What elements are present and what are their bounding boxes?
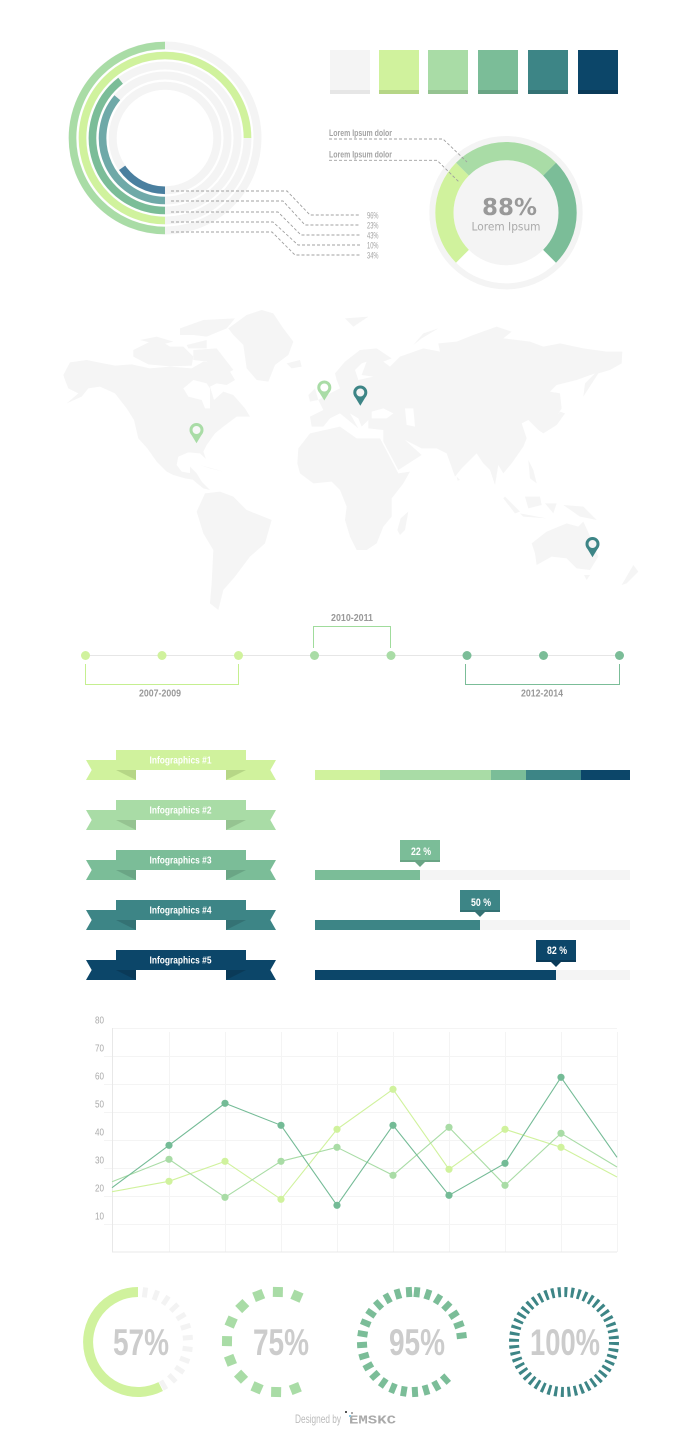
progress bar 82%: 82 % — [547, 945, 567, 957]
donut caption: Lorem Ipsum — [472, 220, 540, 234]
progress bar 22% — [315, 840, 630, 880]
line chart — [95, 1016, 618, 1252]
timeline labels: 2007-2009 — [139, 688, 181, 700]
map pin: Australia — [586, 538, 599, 557]
timeline labels — [139, 613, 563, 700]
ribbon: Infographics #5 — [86, 950, 276, 980]
chart axis labels: 40 — [95, 1128, 104, 1138]
timeline dots — [81, 651, 624, 660]
ribbon: Infographics #1: Infographics #1 — [150, 756, 212, 766]
ring percentage labels: 34% — [367, 250, 378, 260]
panel: donut chart 88% — [329, 128, 580, 286]
chart axis labels: 80 — [95, 1016, 104, 1026]
ribbon: Infographics #5: Infographics #5 — [150, 956, 212, 966]
ring percentage labels: 10% — [367, 240, 378, 250]
ribbon: Infographics #4 — [86, 900, 276, 930]
map pin: USA — [190, 424, 203, 443]
series: dark green — [112, 1074, 617, 1209]
panel: concentric ring chart — [72, 46, 378, 260]
ring tracks — [72, 46, 258, 230]
chart axis labels: 10 — [95, 1212, 104, 1222]
north america and greenland — [63, 310, 302, 480]
map pin: UK — [318, 382, 330, 400]
gauge 95%: 95% — [389, 1322, 445, 1363]
gauge ticks — [142, 1287, 193, 1391]
gauge 75% — [221, 1286, 309, 1397]
footer credit — [295, 1411, 396, 1428]
ring percentage labels: 43% — [367, 230, 378, 240]
chart axis labels: 20 — [95, 1184, 104, 1194]
ring percentage labels: 23% — [367, 220, 378, 230]
gauge 95% — [357, 1287, 467, 1397]
ribbon: Infographics #1 — [86, 750, 276, 780]
eurasia — [308, 317, 622, 485]
chart axis labels — [95, 1016, 104, 1222]
timeline — [81, 613, 624, 700]
ribbon: Infographics #3 — [86, 850, 276, 880]
gauge 57%: 57% — [113, 1322, 169, 1363]
chart grid — [104, 1028, 618, 1252]
map pin: Eastern Europe — [354, 387, 366, 406]
timeline brackets — [86, 626, 620, 684]
progress bar 22%: 22 % — [411, 846, 431, 858]
chart axis labels: 60 — [95, 1072, 104, 1082]
southern continents — [190, 427, 638, 610]
donut value: 88% — [482, 195, 537, 221]
footer credit: Designed by — [295, 1412, 341, 1426]
timeline labels: 2010-2011 — [331, 613, 373, 624]
ring leader lines — [171, 191, 360, 255]
stacked bar — [315, 770, 630, 780]
gauge 57% — [88, 1287, 193, 1392]
ring percentage labels: 96% — [367, 210, 378, 220]
timeline labels: 2012-2014 — [521, 688, 563, 700]
chart axis labels: 50 — [95, 1100, 104, 1110]
chart axis labels: 70 — [95, 1044, 104, 1054]
gauge 75%: 75% — [253, 1322, 309, 1363]
ring arcs — [72, 46, 248, 230]
progress bar 50% — [315, 890, 630, 930]
ribbon: Infographics #3: Infographics #3 — [150, 856, 212, 866]
gauge squares — [221, 1286, 304, 1397]
ribbon: Infographics #4: Infographics #4 — [150, 906, 212, 916]
progress bar 82% — [315, 940, 630, 980]
ribbon: Infographics #2 — [86, 800, 276, 830]
donut leader lines — [329, 139, 467, 182]
donut labels: Lorem Ipsum dolor — [329, 128, 392, 138]
world map — [63, 310, 638, 610]
donut labels — [329, 128, 392, 160]
gauge 100% — [514, 1292, 614, 1392]
series: mid green — [112, 1124, 617, 1201]
ribbon: Infographics #2: Infographics #2 — [150, 806, 212, 816]
colour swatches — [330, 50, 618, 94]
gauge ticks — [357, 1287, 467, 1397]
footer credit: EMSKC — [349, 1414, 396, 1428]
chart axis labels: 30 — [95, 1156, 104, 1166]
series: lime — [112, 1086, 617, 1203]
progress bar 50%: 50 % — [471, 897, 491, 909]
ring percentage labels — [367, 210, 378, 260]
gauge 100%: 100% — [530, 1322, 600, 1363]
donut labels: Lorem Ipsum dolor — [329, 150, 392, 160]
